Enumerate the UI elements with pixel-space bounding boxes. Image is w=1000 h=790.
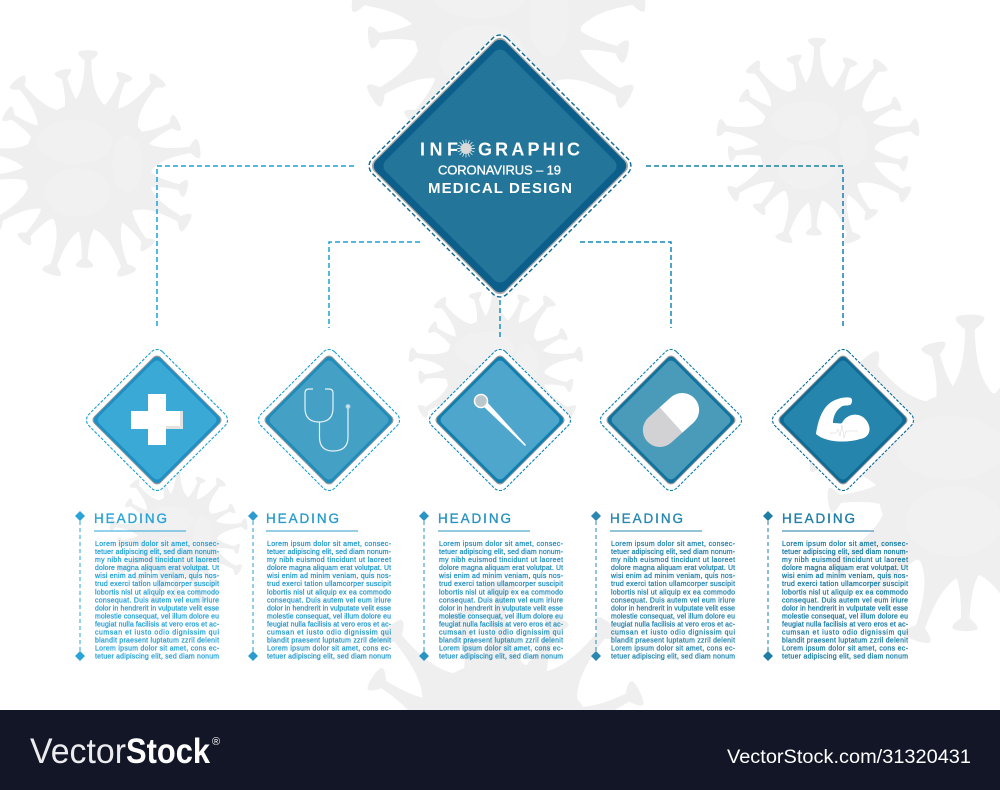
body text: dolor in hendrerit in vulputate velit esse [95,605,219,612]
body text: dolor in hendrerit in vulputate velit esse [267,605,391,612]
background virus: top center [348,0,650,176]
body text: trud exerci tation ullamcorper suscipit [439,581,563,588]
icon: cross [131,394,183,445]
body text: consequat. Duis autem vel eum iriure [439,597,563,604]
body text: Lorem ipsum dolor sit amet, cons ec- [782,646,908,653]
body text: Lorem ipsum dolor sit amet, consec- [611,541,735,548]
body text: feugiat nulla facilisis at vero eros et ac- [611,622,735,628]
heading: HEADING [266,511,339,526]
diamond 3: swab [426,346,574,494]
body text: Lorem ipsum dolor sit amet, consec- [782,541,908,548]
body text: Lorem ipsum dolor sit amet, cons ec- [267,646,391,653]
connector: far left [157,166,354,328]
body text [266,541,391,661]
background virus: right [805,315,1000,653]
body text: dolore magna aliquam erat volutpat. Ut [95,565,219,572]
body text: molestie consequat, vel illum dolore eu [782,613,908,620]
connector: far right [646,166,843,328]
footer logo [30,732,220,771]
body text: lobortis nisl ut aliquip ex ea commodo [95,589,219,596]
body text: trud exerci tation ullamcorper suscipit [95,581,219,588]
body text [438,541,563,661]
marker line [591,511,601,661]
body text [94,541,219,661]
body text: tetuer adipiscing elit, sed diam nonum [95,654,219,661]
column 1 [75,511,219,661]
body text: blandit praesent luptatum zzril delenit [611,638,735,645]
footer logo: Stock [126,732,210,771]
body text: cumsan et iusto odio dignissim qui [782,630,908,636]
body text: dolore magna aliquam erat volutpat. Ut [782,565,908,572]
body text [781,541,908,661]
main diamond title panel [365,31,635,301]
body text: dolor in hendrerit in vulputate velit esse [782,605,908,612]
body text: Lorem ipsum dolor sit amet, consec- [267,541,391,548]
body text: blandit praesent luptatum zzril delenit [267,638,391,645]
body text: my nibh euismod tincidunt ut laoreet [611,557,735,564]
body text: my nibh euismod tincidunt ut laoreet [782,557,908,564]
marker line [763,511,773,661]
body text: my nibh euismod tincidunt ut laoreet [439,557,563,564]
diamond 1: medical cross [83,346,231,494]
column 3 [419,511,563,661]
body text: cumsan et iusto odio dignissim qui [95,630,219,636]
body text: Lorem ipsum dolor sit amet, consec- [439,541,563,548]
body text: tetuer adipiscing elit, sed diam nonum [611,654,735,661]
body text: feugiat nulla facilisis at vero eros et ac- [95,622,219,628]
marker line [248,511,258,661]
body text: dolore magna aliquam erat volutpat. Ut [611,565,735,572]
icon: stethoscope [305,389,350,451]
body text: blandit praesent luptatum zzril delenit [95,638,219,645]
body text: feugiat nulla facilisis at vero eros et ac- [267,622,391,628]
column 4 [591,511,735,661]
marker line [75,511,85,661]
diamond 4: pill [597,346,745,494]
background virus: center [406,277,586,460]
body text: Lorem ipsum dolor sit amet, cons ec- [611,646,735,653]
background virus: lower left [108,463,250,607]
body text: my nibh euismod tincidunt ut laoreet [267,557,391,564]
body text: blandit praesent luptatum zzril delenit [439,638,563,645]
body text: lobortis nisl ut aliquip ex ea commodo [439,589,563,596]
footer bar [0,710,1000,790]
body text: consequat. Duis autem vel eum iriure [267,597,391,604]
body text: consequat. Duis autem vel eum iriure [95,597,219,604]
footer logo: ® [212,736,220,748]
heading: HEADING [610,511,683,526]
title: infographic [420,140,580,160]
body text: dolore magna aliquam erat volutpat. Ut [267,565,391,572]
body text: Lorem ipsum dolor sit amet, cons ec- [439,646,563,653]
body text: tetuer adipiscing elit, sed diam nonum [782,654,908,661]
body text: tetuer adipiscing elit, sed diam nonum- [611,549,735,556]
body text: lobortis nisl ut aliquip ex ea commodo [267,589,391,596]
footer logo: Vector [30,732,126,771]
icon: pill [636,386,706,454]
body text: tetuer adipiscing elit, sed diam nonum [267,654,391,661]
title: coronavirus 19: CORONAVIRUS – 19 [438,162,561,178]
diamond 5: arm [769,346,917,494]
column 5 [763,511,908,661]
body text: lobortis nisl ut aliquip ex ea commodo [611,589,735,596]
body text: wisi enim ad minim veniam, quis nos- [610,573,735,580]
body text: my nibh euismod tincidunt ut laoreet [95,557,219,564]
icon: flexed arm [816,397,870,442]
title: infographic: GRAPHIC [478,140,580,160]
title: medical design: MEDICAL DESIGN [428,180,572,197]
body text: tetuer adipiscing elit, sed diam nonum- [95,549,219,556]
body text: consequat. Duis autem vel eum iriure [782,597,908,604]
body text: cumsan et iusto odio dignissim qui [611,630,735,636]
heading: HEADING [438,511,511,526]
body text: blandit praesent luptatum zzril delenit [782,638,908,645]
body text: feugiat nulla facilisis at vero eros et ac- [439,622,563,628]
connector: center [499,300,501,340]
body text: Lorem ipsum dolor sit amet, consec- [95,541,219,548]
body text: trud exerci tation ullamcorper suscipit [267,581,391,588]
body text: trud exerci tation ullamcorper suscipit [782,581,908,588]
title: infographic: INF [420,140,458,160]
body text: cumsan et iusto odio dignissim qui [267,630,391,636]
body text: molestie consequat, vel illum dolore eu [611,613,735,620]
body text: molestie consequat, vel illum dolore eu [95,613,219,620]
icon: virus in title [457,140,475,158]
body text: lobortis nisl ut aliquip ex ea commodo [782,589,908,596]
body text [610,541,735,661]
body text: cumsan et iusto odio dignissim qui [439,630,563,636]
body text: consequat. Duis autem vel eum iriure [611,597,735,604]
body text: wisi enim ad minim veniam, quis nos- [781,573,908,580]
column 2 [248,511,391,661]
body text: tetuer adipiscing elit, sed diam nonum- [439,549,563,556]
body text: tetuer adipiscing elit, sed diam nonum- [267,549,391,556]
body text: wisi enim ad minim veniam, quis nos- [438,573,563,580]
body text: Lorem ipsum dolor sit amet, cons ec- [95,646,219,653]
body text: wisi enim ad minim veniam, quis nos- [94,573,219,580]
body text: feugiat nulla facilisis at vero eros et ac- [782,622,908,628]
body text: dolor in hendrerit in vulputate velit esse [439,605,563,612]
marker line [419,511,429,661]
background virus: top right [714,38,922,249]
icon: swab [474,394,526,446]
background virus: bottom center, upper part only [336,581,664,781]
body text: tetuer adipiscing elit, sed diam nonum- [782,549,908,556]
footer id: VectorStock.com/31320431 [727,747,971,768]
heading: HEADING [782,511,855,526]
diamond 2: stethoscope [255,346,403,494]
body text: trud exerci tation ullamcorper suscipit [611,581,735,588]
body text: wisi enim ad minim veniam, quis nos- [266,573,391,580]
background virus: top left [0,50,204,283]
body text: tetuer adipiscing elit, sed diam nonum [439,654,563,661]
connector: inner left [329,242,420,328]
body text: dolor in hendrerit in vulputate velit esse [611,605,735,612]
body text: molestie consequat, vel illum dolore eu [267,613,391,620]
connector: inner right [580,242,671,328]
body text: dolore magna aliquam erat volutpat. Ut [439,565,563,572]
body text: molestie consequat, vel illum dolore eu [439,613,563,620]
heading: HEADING [94,511,167,526]
